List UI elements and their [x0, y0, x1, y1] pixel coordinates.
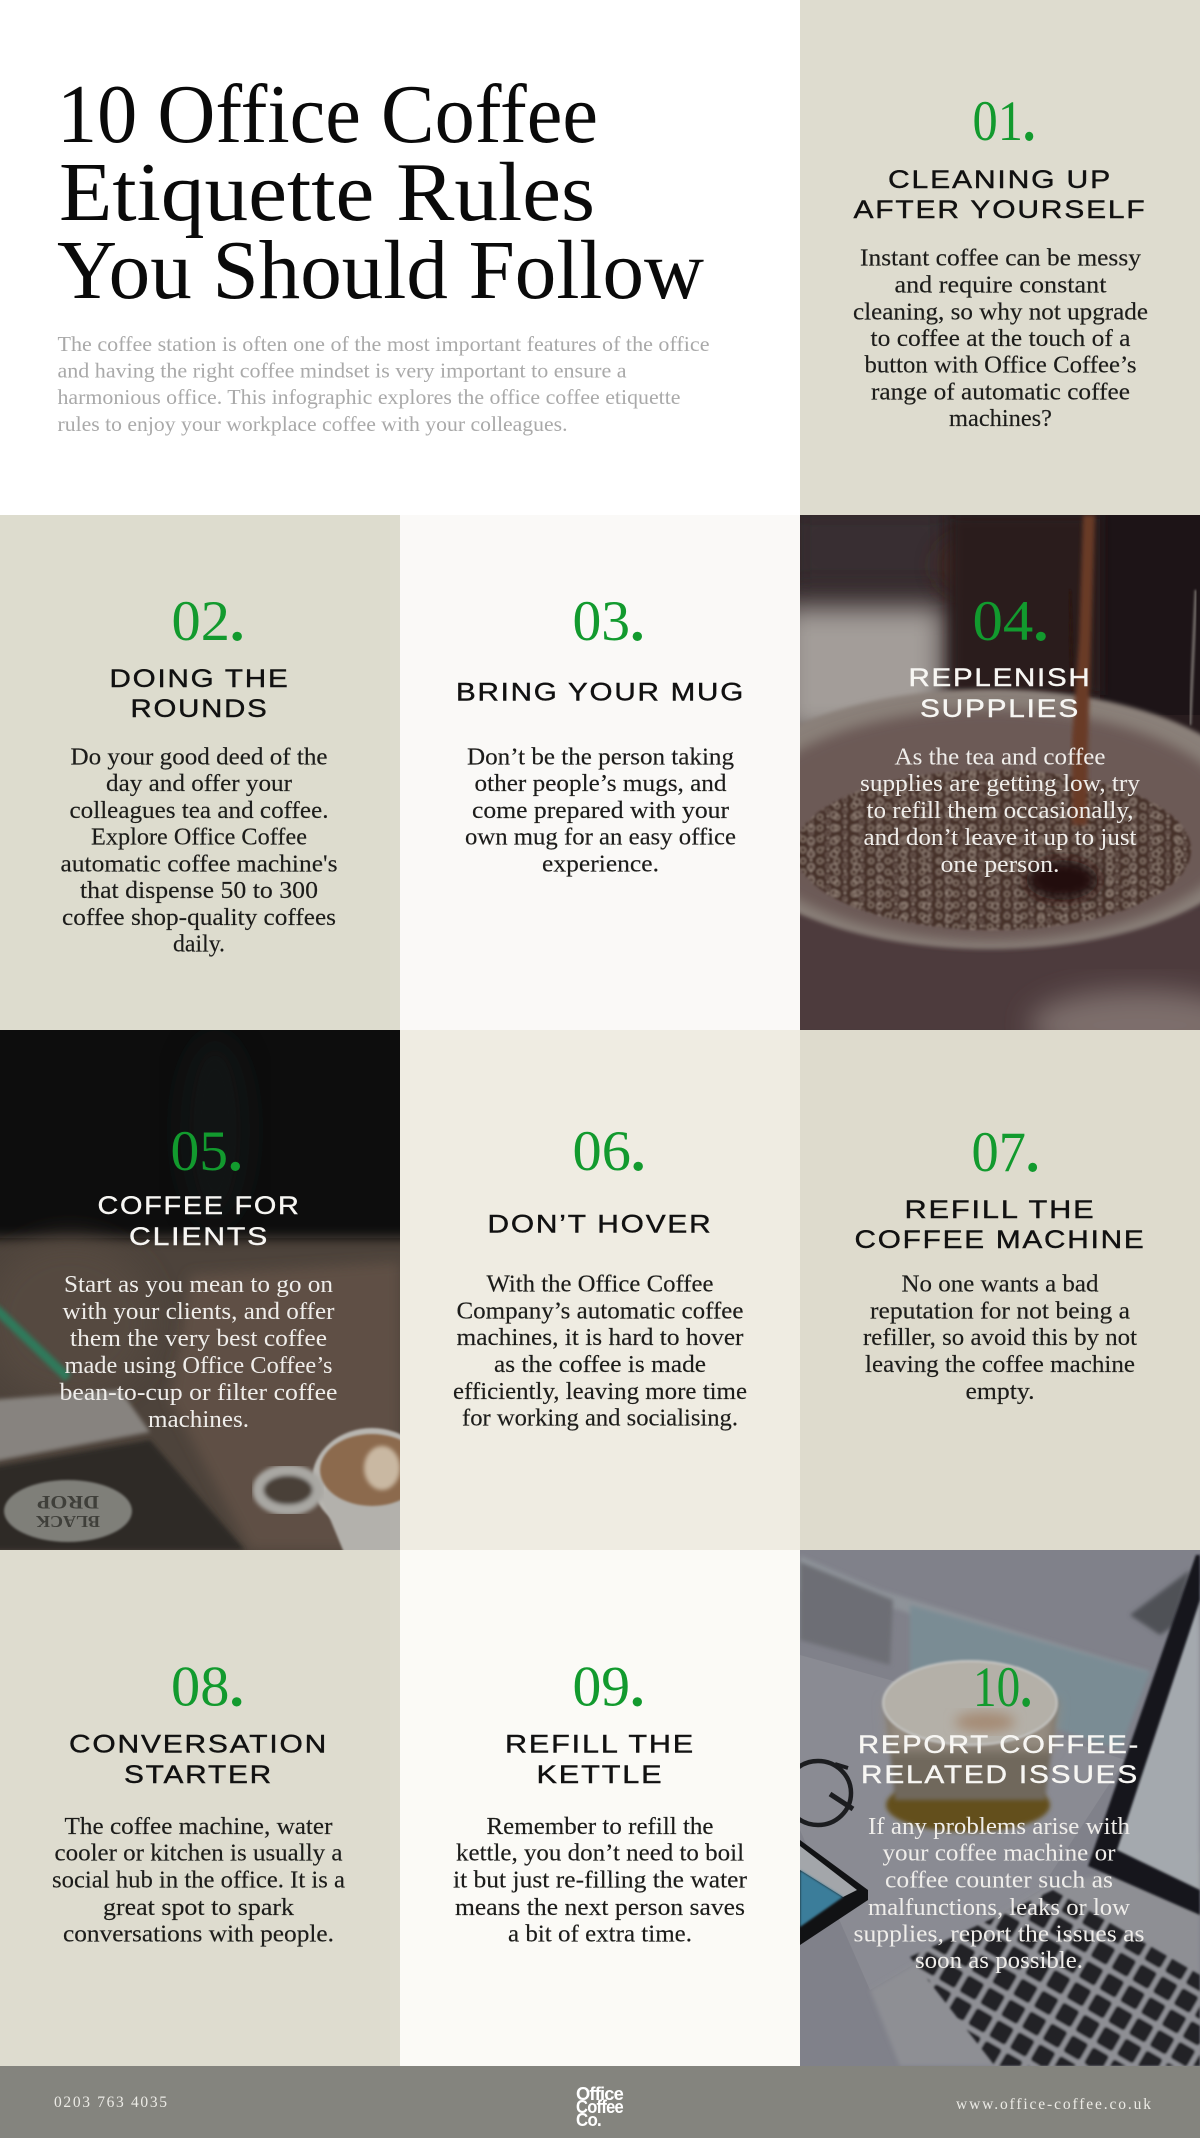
logo: Office — [576, 2084, 624, 2104]
body 08 — [52, 1814, 345, 1948]
heading 03: BRING YOUR MUG — [456, 678, 745, 706]
body 09 — [453, 1814, 747, 1948]
body 02: coffee shop-quality coffees — [62, 905, 336, 931]
heading 02: DOING THE — [110, 665, 290, 693]
logo: Co. — [576, 2110, 601, 2130]
body 07: refiller, so avoid this by not — [863, 1325, 1137, 1351]
body 08: conversations with people. — [63, 1922, 334, 1948]
heading 08 — [69, 1730, 328, 1789]
body 07: empty. — [966, 1379, 1034, 1405]
cup rim — [800, 686, 1200, 952]
body 06: With the Office Coffee — [486, 1272, 714, 1298]
body 07: leaving the coffee machine — [865, 1352, 1135, 1378]
body 05: Start as you mean to go on — [64, 1272, 333, 1298]
cup inner — [740, 709, 1200, 941]
body 03: come prepared with your — [472, 798, 729, 824]
body 05: them the very best coffee — [70, 1326, 327, 1352]
laptop bezel — [1088, 1555, 1200, 1915]
photo: laptop, coffee glass and phone — [785, 1550, 1200, 2066]
body 03: Don’t be the person taking — [467, 744, 734, 770]
body 03 — [465, 744, 736, 878]
number 09: 09. — [572, 1656, 644, 1718]
body 04: one person. — [940, 852, 1060, 878]
intro paragraph: and having the right coffee mindset is very important to ensure a — [58, 358, 627, 382]
heading 02: ROUNDS — [130, 695, 268, 723]
coffee stream — [1072, 515, 1095, 825]
second thin stream — [1069, 590, 1073, 690]
laptop base — [872, 1874, 1200, 2066]
coffee surface — [795, 770, 1191, 930]
title: 10 Office Coffee — [57, 68, 598, 161]
black book — [0, 1440, 245, 1550]
heading 08: CONVERSATION — [69, 1730, 328, 1758]
panel: rule 08 — [0, 1550, 400, 2066]
body 05: machines. — [148, 1407, 249, 1433]
body 01: and require constant — [894, 272, 1107, 298]
number 07: 07. — [972, 1121, 1040, 1184]
panel: rule 01 — [800, 0, 1200, 515]
heading 04: REPLENISH — [908, 664, 1092, 692]
heading 01: AFTER YOURSELF — [854, 196, 1146, 224]
body 06: Company’s automatic coffee — [456, 1298, 744, 1324]
heading 05: CLIENTS — [129, 1223, 269, 1251]
body 02: that dispense 50 to 300 — [80, 878, 318, 904]
round stamp — [4, 1480, 132, 1542]
body 10 — [854, 1814, 1144, 1974]
heading 08: STARTER — [124, 1761, 273, 1789]
logo: Coffee — [576, 2097, 624, 2117]
cup body — [800, 904, 1200, 1030]
intro paragraph: The coffee station is often one of the most important features of the office — [58, 332, 710, 356]
photo: coffee being poured into cup — [800, 515, 1200, 1030]
body 08: social hub in the office. It is a — [52, 1868, 345, 1894]
website: www.office-coffee.co.uk — [956, 2096, 1151, 2113]
heading 09 — [505, 1730, 695, 1789]
body 03: own mug for an easy office — [465, 824, 736, 850]
stamp lettering: BLACK — [35, 1512, 100, 1531]
phone — [800, 1840, 868, 1945]
body 02: automatic coffee machine's — [60, 852, 338, 878]
panel: rule 10 with laptop photo — [785, 1550, 1200, 2066]
body 10: soon as possible. — [915, 1948, 1083, 1974]
number 08: 08. — [171, 1656, 244, 1718]
body 05: made using Office Coffee’s — [64, 1353, 332, 1379]
body 06 — [453, 1272, 747, 1432]
body 09: a bit of extra time. — [508, 1922, 692, 1948]
body 03: other people’s mugs, and — [474, 771, 726, 797]
thin light streak at right edge — [1190, 590, 1196, 725]
body 04: As the tea and coffee — [894, 744, 1106, 770]
green pen — [0, 1308, 68, 1378]
body 08: The coffee machine, water — [64, 1814, 332, 1840]
heading 09: REFILL THE — [505, 1730, 695, 1758]
body 03: experience. — [542, 852, 659, 878]
body 01: cleaning, so why not upgrade — [853, 300, 1148, 326]
white notebook — [0, 1390, 150, 1462]
coaster — [883, 1790, 1053, 1836]
phone number: 0203 763 4035 — [54, 2094, 167, 2111]
number 01: 01. — [972, 90, 1036, 153]
body 04 — [860, 744, 1140, 878]
panel: rule 06 — [400, 1030, 800, 1550]
body 06: as the coffee is made — [494, 1352, 706, 1378]
number 04: 04. — [972, 590, 1048, 653]
intro paragraph: rules to enjoy your workplace coffee with your colleagues. — [58, 412, 568, 436]
heading 01 — [854, 166, 1146, 224]
body 08: cooler or kitchen is usually a — [54, 1840, 343, 1866]
panel: rule 05 with desk photo — [0, 1030, 400, 1550]
intro paragraph — [58, 332, 710, 436]
body 01: range of automatic coffee — [871, 380, 1130, 406]
body 01: to coffee at the touch of a — [870, 326, 1131, 352]
body 01 — [853, 246, 1148, 432]
body 02: colleagues tea and coffee. — [70, 798, 328, 824]
heading 06: DON’T HOVER — [488, 1210, 712, 1238]
keyboard — [910, 1890, 1200, 2066]
heading 07: COFFEE MACHINE — [854, 1226, 1146, 1254]
body 08: great spot to spark — [103, 1895, 294, 1921]
glass body — [885, 1700, 1058, 1800]
panel: rule 07 — [800, 1030, 1200, 1550]
body 04: to refill them occasionally, — [866, 798, 1134, 824]
body 06: machines, it is hard to hover — [456, 1325, 744, 1351]
number 10: 10. — [973, 1656, 1032, 1719]
intro paragraph: harmonious office. This infographic explores the office coffee etiquette — [58, 385, 680, 409]
stamp lettering: DROP — [37, 1491, 99, 1512]
body 04: and don’t leave it up to just — [864, 825, 1137, 851]
body 10: malfunctions, leaks or low — [868, 1895, 1131, 1921]
photo: notebook and latte — [0, 1030, 400, 1550]
body 10: If any problems arise with — [868, 1814, 1130, 1840]
glass top — [883, 1661, 1057, 1745]
heading 07: REFILL THE — [904, 1196, 1096, 1224]
laptop screen — [1116, 1588, 1200, 1892]
latte cup — [312, 1426, 400, 1518]
panel: rule 03 — [400, 515, 800, 1030]
body 10: supplies, report the issues as — [854, 1922, 1144, 1948]
heading 09: KETTLE — [536, 1761, 664, 1789]
title — [57, 68, 704, 317]
body 04: supplies are getting low, try — [860, 771, 1140, 797]
body 06: efficiently, leaving more time — [453, 1379, 747, 1405]
panel: rule 09 — [400, 1550, 800, 2066]
logo — [576, 2084, 624, 2130]
heading 04: SUPPLIES — [920, 695, 1080, 723]
title: Etiquette Rules — [59, 146, 595, 239]
heading 10: RELATED ISSUES — [861, 1761, 1139, 1789]
body 02: day and offer your — [106, 771, 292, 797]
number 06: 06. — [572, 1120, 646, 1183]
body 07: No one wants a bad — [902, 1272, 1098, 1298]
small device top right — [1130, 1570, 1190, 1635]
body 01: Instant coffee can be messy — [860, 246, 1141, 272]
body 02 — [60, 744, 338, 958]
body 02: Explore Office Coffee — [91, 824, 307, 850]
heading 02 — [110, 665, 290, 723]
heading 07 — [854, 1196, 1146, 1254]
title block — [57, 68, 710, 436]
body 05 — [60, 1272, 338, 1433]
heading 05 — [98, 1192, 300, 1251]
body 09: Remember to refill the — [486, 1814, 714, 1840]
body 09: means the next person saves — [455, 1895, 745, 1921]
body 07: reputation for not being a — [870, 1298, 1130, 1324]
panel: rule 04 with coffee pour photo — [800, 515, 1200, 1030]
body 01: machines? — [949, 406, 1052, 432]
body 07 — [863, 1272, 1137, 1405]
number 03: 03. — [572, 590, 644, 653]
title: You Should Follow — [57, 224, 704, 317]
glasses — [800, 1758, 854, 1828]
body 05: with your clients, and offer — [62, 1299, 335, 1325]
body 02: Do your good deed of the — [70, 744, 328, 770]
number 05: 05. — [170, 1120, 242, 1183]
heading 01: CLEANING UP — [888, 166, 1112, 194]
body 05: bean-to-cup or filter coffee — [60, 1380, 338, 1406]
body 06: for working and socialising. — [462, 1406, 738, 1432]
heading 05: COFFEE FOR — [98, 1192, 300, 1220]
body 09: it but just re-filling the water — [453, 1868, 747, 1894]
body 10: coffee counter such as — [885, 1868, 1113, 1894]
panel: rule 02 — [0, 515, 400, 1030]
number 02: 02. — [172, 590, 244, 653]
body 10: your coffee machine or — [882, 1840, 1116, 1866]
heading 10 — [858, 1731, 1140, 1789]
body 02: daily. — [173, 932, 225, 958]
stamp lettering — [36, 1496, 100, 1527]
heading 04 — [908, 664, 1092, 723]
heading 10: REPORT COFFEE- — [858, 1731, 1140, 1759]
footer — [0, 2066, 1200, 2138]
body 09: kettle, you don’t need to boil — [456, 1840, 744, 1866]
body 01: button with Office Coffee’s — [864, 352, 1136, 378]
